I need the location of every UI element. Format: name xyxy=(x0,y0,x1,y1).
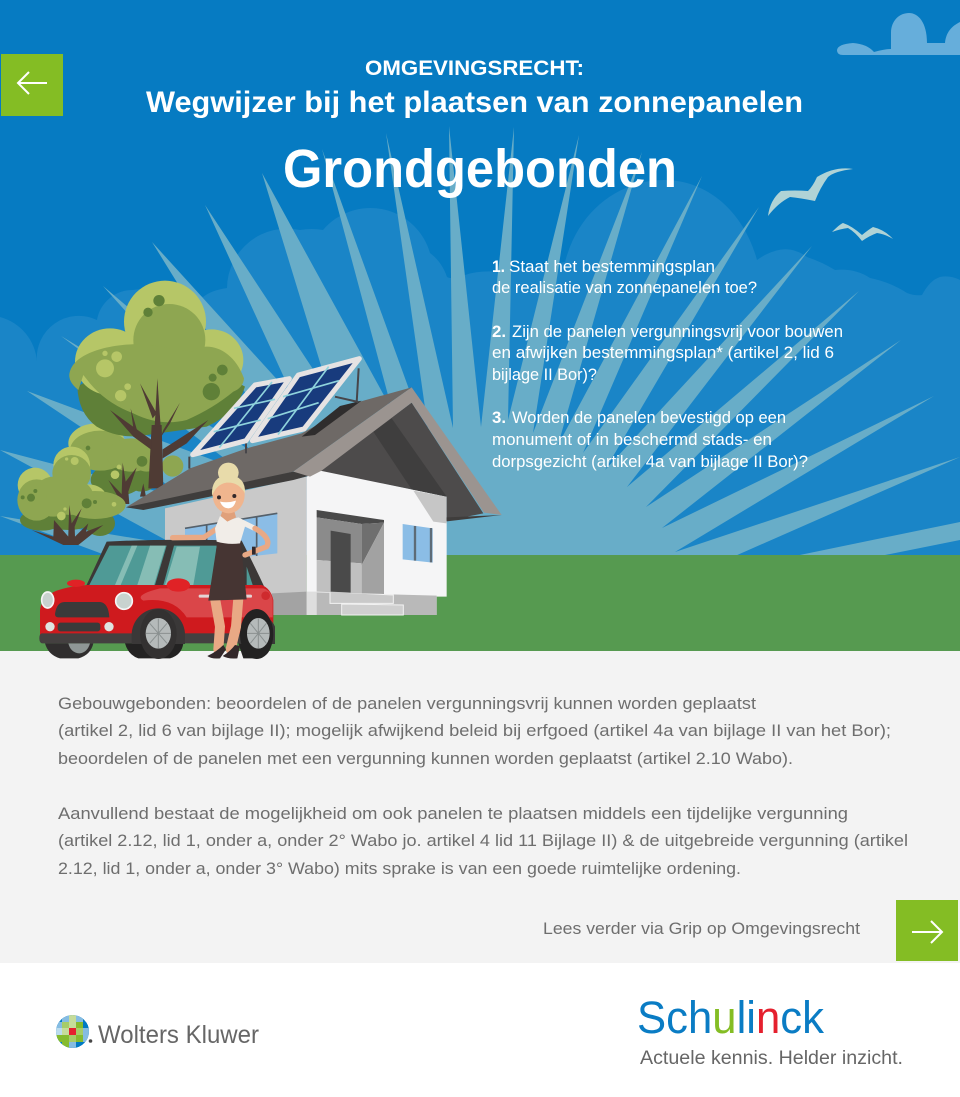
window right xyxy=(403,524,433,563)
car lower grille xyxy=(58,623,100,631)
roof eave underside xyxy=(126,472,312,510)
wall shadow xyxy=(413,491,447,523)
car window rear xyxy=(247,567,253,585)
car tail light xyxy=(261,591,270,600)
body text paragraph 2: Aanvullend bestaat de mogelijkheid om ook panelen te plaatsen middels een tijdelijke vergunning xyxy=(58,804,848,823)
car side window xyxy=(163,546,217,585)
logo wordmark: Wolters Kluwer xyxy=(98,1021,259,1049)
woman smile xyxy=(220,501,236,508)
woman skirt xyxy=(208,542,247,601)
grass xyxy=(0,555,960,652)
shadow under panels xyxy=(302,401,362,437)
solar panel right xyxy=(252,359,359,441)
icon: middle tree xyxy=(68,423,183,504)
rear wheel xyxy=(238,609,275,659)
sky background xyxy=(0,0,960,556)
car headlights xyxy=(42,592,132,609)
woman eyes xyxy=(217,494,236,499)
body text paragraph 2: 2.12, lid 1, onder a, onder 3° Wabo) mits sprake is van een goede ruimtelijke ordening. xyxy=(58,859,741,878)
front wheel xyxy=(125,608,185,659)
foundation xyxy=(272,592,437,615)
questions: dorpsgezicht (artikel 4a van bijlage II Bor)? xyxy=(492,452,808,471)
questions: 1. xyxy=(492,257,505,276)
woman head xyxy=(213,477,245,513)
car door shine xyxy=(141,588,273,617)
logo: Wolters Kluwer xyxy=(56,1015,259,1049)
car grille xyxy=(55,602,109,617)
house left wall xyxy=(165,477,307,615)
solar panel left xyxy=(193,379,289,455)
kicker heading: OMGEVINGSRECHT: xyxy=(365,57,584,80)
globe mosaic xyxy=(56,1015,90,1049)
body text paragraph 1: beoordelen of de panelen met een vergunning kunnen worden geplaatst (artikel 2.10 Wabo). xyxy=(58,749,793,768)
body text paragraph 2: (artikel 2.12, lid 1, onder a, onder 2° Wabo jo. artikel 4 lid 11 Bijlage II) & de uitgebreide vergunning (artikel xyxy=(58,831,908,850)
logo dot xyxy=(89,1039,92,1043)
questions: Zijn de panelen vergunningsvrij voor bouwen xyxy=(512,322,843,341)
cloud top right xyxy=(837,13,960,55)
questions: bijlage II Bor)? xyxy=(492,365,597,384)
tagline: Actuele kennis. Helder inzicht. xyxy=(640,1047,903,1069)
body text paragraph 1: Gebouwgebonden: beoordelen of de panelen vergunningsvrij kunnen worden geplaatst xyxy=(58,694,756,713)
questions: Staat het bestemmingsplan xyxy=(509,257,715,276)
house right wall xyxy=(307,470,447,615)
woman bun xyxy=(218,463,239,483)
woman neck xyxy=(221,510,236,522)
read more link: Lees verder via Grip op Omgevingsrecht xyxy=(543,919,860,938)
car window reflections xyxy=(115,546,200,585)
questions: 3. xyxy=(492,408,506,427)
woman front arm xyxy=(245,528,268,555)
car bumper xyxy=(39,633,138,643)
porch xyxy=(317,510,384,594)
questions: monument of in beschermd stads- en xyxy=(492,430,772,449)
icon: left tree xyxy=(17,447,126,545)
body text paragraph 1: (artikel 2, lid 6 van bijlage II); mogelijk afwijkend beleid bij erfgoed (artikel 4a van bijlage II van het Bor); xyxy=(58,721,891,740)
next button xyxy=(896,900,958,961)
sun rays xyxy=(0,126,960,556)
questions: Worden de panelen bevestigd op een xyxy=(512,408,786,427)
woman blouse xyxy=(215,516,258,544)
car windshield xyxy=(89,546,167,585)
woman legs xyxy=(215,598,238,649)
roof xyxy=(126,387,412,509)
gable lower trim xyxy=(447,515,502,521)
logo: Schulinck: Schulinck xyxy=(637,992,824,1043)
back button xyxy=(1,54,63,116)
body text paragraph 1 xyxy=(58,694,891,768)
car cabin frame xyxy=(85,540,265,588)
icon: big tree xyxy=(69,281,245,488)
questions: 2. xyxy=(492,322,506,341)
window left xyxy=(185,513,277,557)
woman watch xyxy=(252,547,256,555)
woman shoes xyxy=(207,645,240,659)
body text paragraph 2 xyxy=(58,804,908,878)
gable interior xyxy=(320,403,483,521)
main heading: Wegwijzer bij het plaatsen van zonnepanelen xyxy=(146,86,803,119)
bird small xyxy=(832,223,893,241)
panel mounts xyxy=(189,368,359,469)
car door handle xyxy=(199,595,252,598)
woman hair xyxy=(212,474,245,496)
icon: house xyxy=(126,359,502,615)
background clouds xyxy=(0,180,960,556)
questions: en afwijken bestemmingsplan* (artikel 2, lid 6 xyxy=(492,343,834,362)
car mirrors xyxy=(67,578,190,592)
car sill xyxy=(180,633,243,643)
questions xyxy=(492,257,843,471)
car left rim xyxy=(68,643,90,653)
questions: de realisatie van zonnepanelen toe? xyxy=(492,278,757,297)
car fog lamps xyxy=(45,622,114,631)
car body xyxy=(40,585,273,635)
woman back arm xyxy=(173,528,217,538)
icon: red car xyxy=(39,540,275,659)
section title: Grondgebonden xyxy=(283,139,677,199)
icon: woman xyxy=(173,463,268,659)
bird large xyxy=(768,168,853,216)
text panel background xyxy=(0,651,960,963)
gable fascia xyxy=(293,387,502,515)
illustration: tree, house, car and woman xyxy=(17,281,502,659)
car left front wheel xyxy=(45,643,93,658)
